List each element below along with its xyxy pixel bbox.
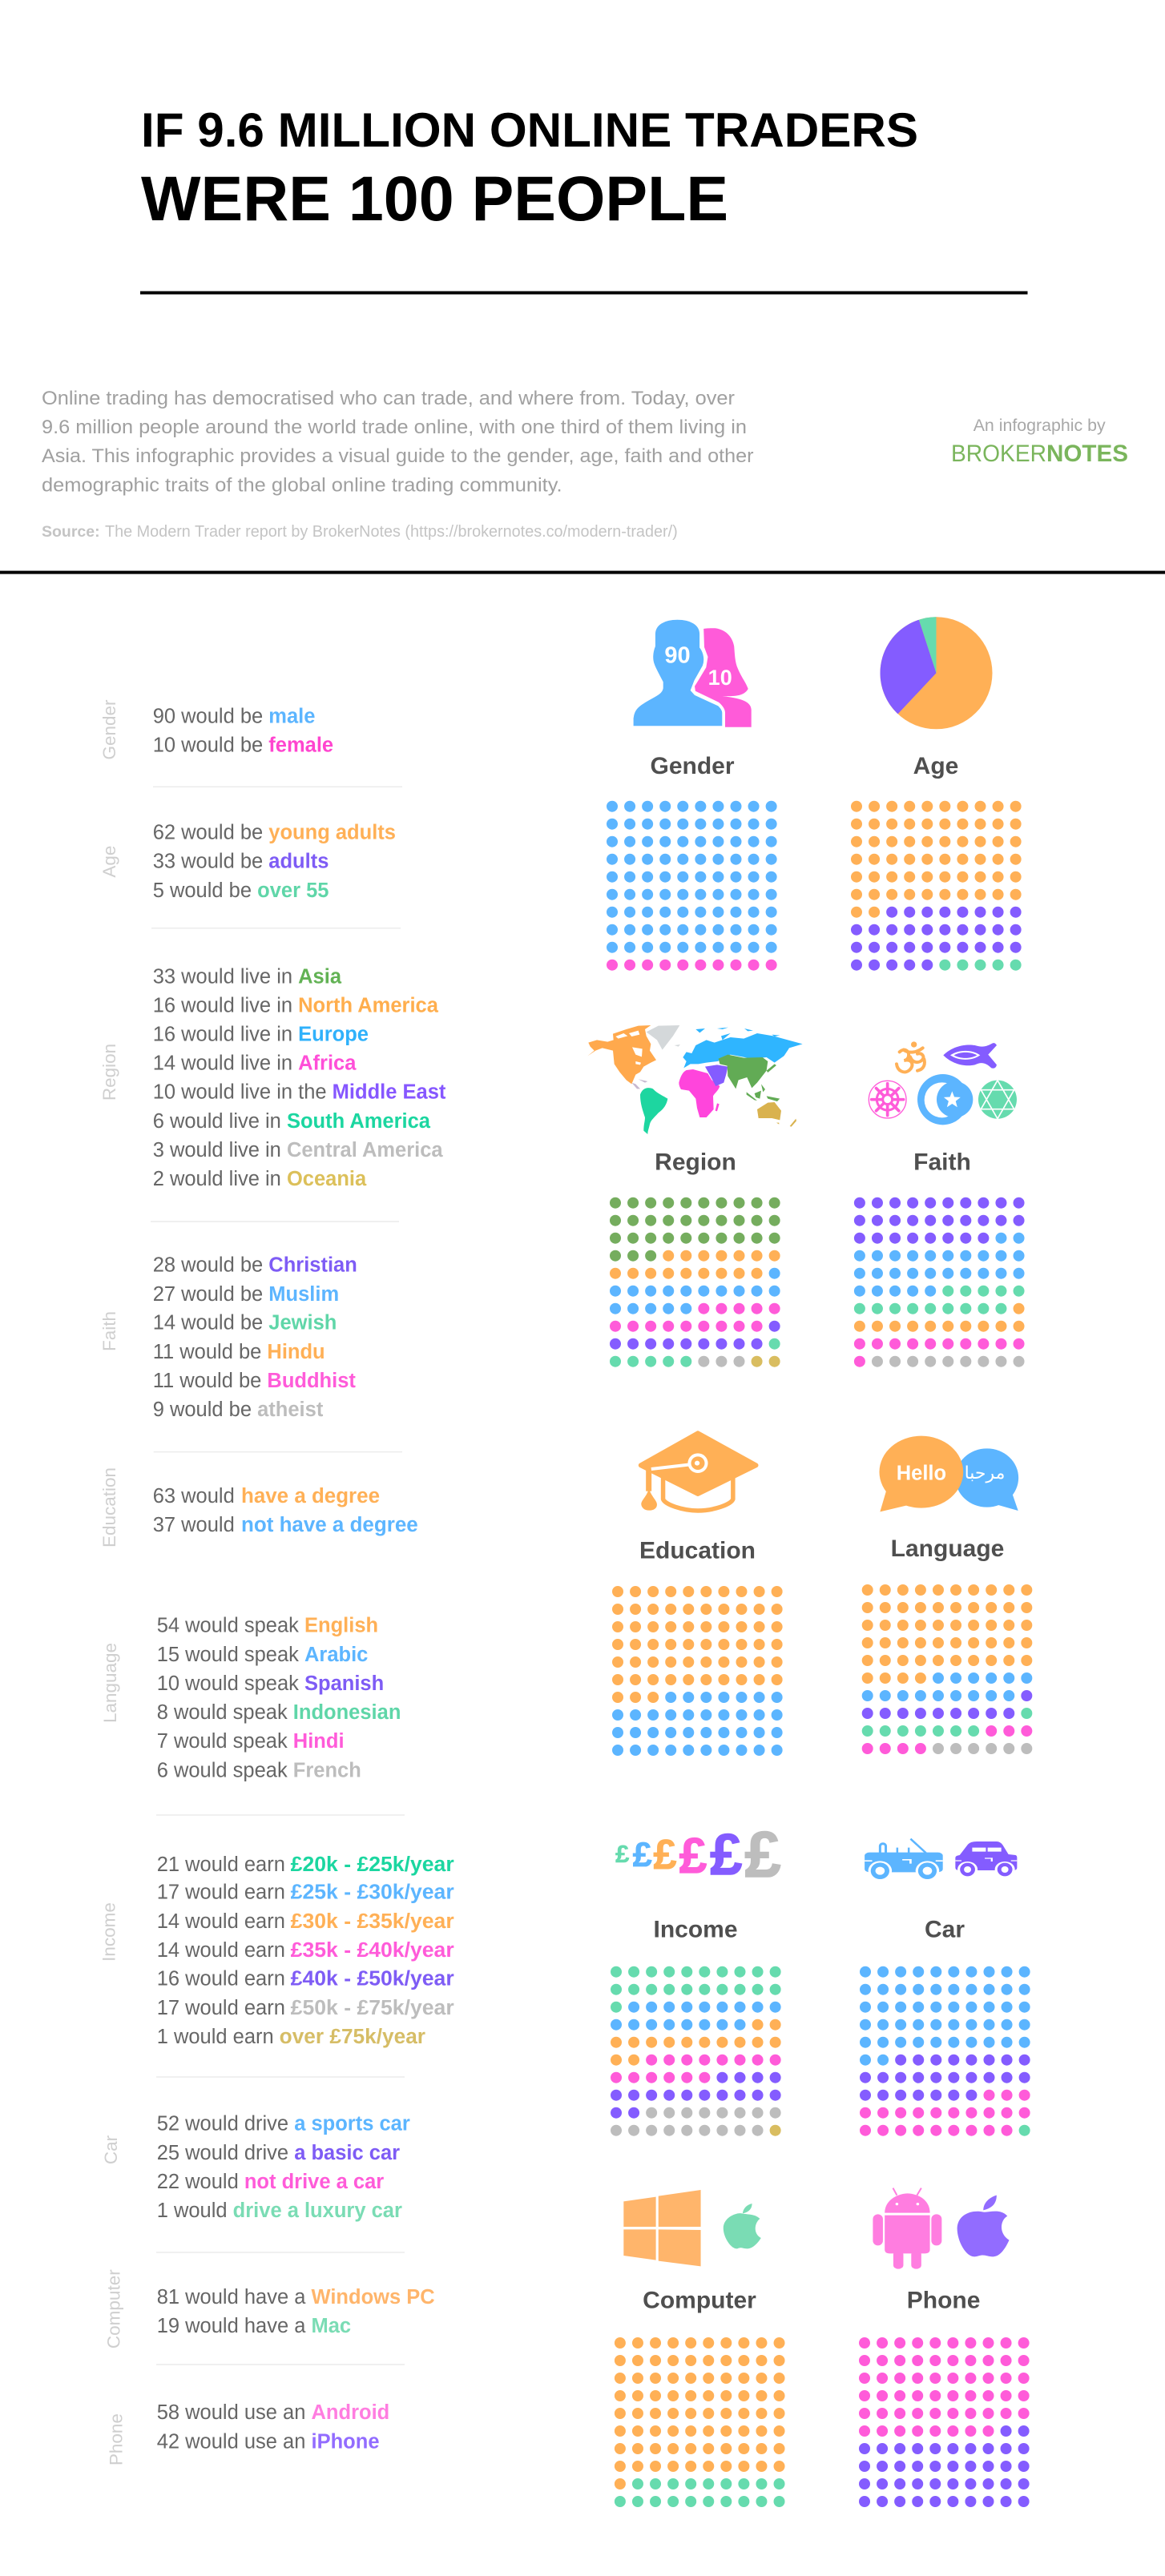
stats: region: Region [99, 1044, 119, 1101]
dot grid: computer [620, 2343, 780, 2502]
stats: income [99, 1854, 454, 2048]
stats: income: Income [99, 1902, 119, 1962]
heading: Car: Car [925, 1917, 965, 1943]
stats: income: 17 would earn [157, 1997, 285, 2019]
icon: pound signs: £ [744, 1819, 781, 1891]
dot grid: phone [865, 2343, 1025, 2502]
icon: male and female silhouettes [632, 618, 752, 727]
heading: Faith: Faith [913, 1149, 971, 1176]
icon: star of David [978, 1081, 1017, 1119]
icon: speech bubbles: Hello [897, 1462, 946, 1484]
stats: income: 17 would earn [157, 1882, 285, 1904]
stats: region: 16 would live in Europe [153, 1024, 369, 1046]
stats: language: 10 would speak Spanish [157, 1672, 384, 1695]
intro text: Online trading has democratised who can trade, and where from. Today, over [42, 388, 735, 409]
icon: male and female silhouettes: 90 [664, 642, 691, 668]
intro text: 9.6 million people around the world trade online, with one third of them living in [42, 417, 747, 438]
dot grid: region [615, 1203, 776, 1362]
intro text: demographic traits of the global online trading community. [42, 474, 562, 497]
icon: star and crescent [917, 1074, 973, 1125]
stats: income: £50k - £75k/year [291, 1997, 454, 2019]
stats: education [99, 1467, 418, 1548]
panel: phone [865, 2188, 1025, 2502]
stats: faith: 28 would be Christian [153, 1254, 357, 1277]
stats: region: 14 would live in Africa [153, 1053, 357, 1075]
panel: education [618, 1433, 778, 1750]
stats: income: £35k - £40k/year [291, 1939, 454, 1962]
heading: Age: Age [913, 753, 958, 779]
panel: income [615, 1819, 781, 2131]
panel: computer [620, 2190, 780, 2502]
icon: faith symbols [869, 1043, 1017, 1125]
heading: Education: Education [639, 1538, 756, 1564]
stats: computer: 81 would have a Windows PC [157, 2286, 435, 2308]
icon: age pie chart [880, 617, 992, 729]
stats: faith: 11 would be Buddhist [153, 1370, 356, 1392]
icon: Windows and Apple logos [623, 2190, 761, 2266]
title: WERE 100 PEOPLE [141, 163, 728, 234]
stats: language: 7 would speak Hindi [157, 1730, 345, 1753]
icon: cars [865, 1839, 1017, 1881]
stats: income: 14 would earn [157, 1939, 285, 1962]
stats: language: 15 would speak Arabic [157, 1644, 368, 1666]
source line: The Modern Trader report by BrokerNotes (https://brokernotes.co/modern-trader/) [105, 523, 678, 541]
stats: car: Car [101, 2135, 121, 2164]
dot grid: language [868, 1590, 1028, 1749]
stats: education: Education [99, 1467, 119, 1548]
stats: language: 54 would speak English [157, 1615, 378, 1637]
stats: income: £40k - £50k/year [291, 1968, 454, 1990]
stats: computer: Computer [103, 2269, 123, 2349]
dot grid: age [857, 807, 1017, 965]
title: IF 9.6 MILLION ONLINE TRADERS [141, 103, 918, 157]
stats: income: £20k - £25k/year [291, 1854, 454, 1876]
stats: gender: 10 would be female [153, 735, 333, 757]
icon: om [897, 1043, 925, 1072]
credit: BrokerNotes logo: BROKER [951, 441, 1046, 467]
stats: phone [106, 2401, 389, 2465]
stats: region [99, 966, 446, 1190]
stats: age: Age [99, 846, 119, 878]
dot grid: faith [860, 1203, 1020, 1362]
stats: age: 62 would be young adults [153, 822, 396, 844]
icon: speech bubbles [879, 1436, 1018, 1511]
stats: phone: Phone [106, 2413, 126, 2465]
icon: pound signs: £ [679, 1829, 707, 1884]
icon: Android and Apple logos [873, 2188, 1010, 2269]
stats: faith [99, 1254, 357, 1421]
icon: pound signs [615, 1819, 781, 1891]
icon: basic car [955, 1841, 1017, 1878]
panel: age [857, 617, 1017, 965]
icon: world map [587, 1025, 803, 1134]
icon: apple [957, 2196, 1010, 2256]
stats: income: over £75k/year [280, 2026, 425, 2048]
stats: income: £30k - £35k/year [291, 1910, 454, 1933]
stats: age: 5 would be over 55 [153, 879, 329, 902]
icon: pound signs: £ [615, 1840, 629, 1868]
icon: android robot [873, 2188, 941, 2269]
intro text: Asia. This infographic provides a visual guide to the gender, age, faith and other [42, 445, 753, 467]
stats: gender: Gender [99, 699, 119, 760]
heading: Computer: Computer [643, 2288, 756, 2314]
panel: stat list [99, 699, 454, 2465]
stats: gender: 90 would be male [153, 706, 315, 728]
icon: pound signs: £ [633, 1836, 652, 1874]
credit: BrokerNotes logo: NOTES [1046, 441, 1128, 467]
stats: income: £25k - £30k/year [291, 1882, 454, 1904]
icon: pound signs: £ [710, 1823, 742, 1887]
icon: male and female silhouettes: 10 [708, 666, 732, 690]
heading: Language: Language [891, 1536, 1004, 1562]
intro text [42, 388, 753, 497]
stats: region: 3 would live in Central America [153, 1139, 443, 1161]
dot grid: gender [612, 807, 772, 965]
icon: apple [724, 2204, 761, 2248]
heading: Income: Income [653, 1917, 738, 1943]
stats: education: 37 would [153, 1514, 235, 1536]
stats: computer: 19 would have a Mac [157, 2315, 351, 2337]
stats: region: 33 would live in Asia [153, 966, 342, 988]
stats: language [100, 1615, 401, 1781]
title [141, 103, 918, 234]
heading: Region: Region [655, 1149, 736, 1176]
icon: graduation cap [641, 1433, 756, 1511]
stats: faith: 9 would be atheist [153, 1399, 324, 1421]
panel: gender [612, 618, 772, 965]
source line: Source: [42, 523, 100, 541]
stats: region: 10 would live in the Middle East [153, 1081, 446, 1104]
stats: region: 2 would live in Oceania [153, 1168, 367, 1190]
icon: convertible [865, 1839, 943, 1881]
icon: dharma wheel [869, 1081, 906, 1118]
panel: faith [860, 1043, 1020, 1362]
heading: Gender: Gender [650, 753, 735, 779]
panel: car [865, 1839, 1026, 2131]
dot grid: income [616, 1972, 776, 2131]
stats: region: 16 would live in North America [153, 995, 439, 1017]
stats: region: 6 would live in South America [153, 1110, 431, 1133]
panel: region [587, 1025, 803, 1362]
stats: car [101, 2113, 410, 2222]
stats: income: 21 would earn [157, 1854, 285, 1876]
stats: faith: 11 would be Hindu [153, 1341, 325, 1363]
stats: computer [103, 2269, 435, 2349]
stats: faith: 14 would be Jewish [153, 1312, 337, 1334]
stats: language: Language [100, 1643, 120, 1723]
stats: income: 1 would earn [157, 2026, 274, 2048]
stats: car: 25 would drive a basic car [157, 2142, 400, 2164]
panel: language [868, 1436, 1028, 1749]
stats: phone: 42 would use an iPhone [157, 2431, 380, 2453]
icon: windows logo [623, 2190, 701, 2266]
stats: income: 14 would earn [157, 1910, 285, 1933]
stats: car: 52 would drive a sports car [157, 2113, 410, 2135]
icon: speech bubbles: مرحبا [965, 1463, 1005, 1483]
stats: education: 63 would [153, 1485, 235, 1507]
stats: car: 22 would not drive a car [157, 2171, 384, 2193]
stats: age [99, 822, 396, 902]
stats: car: 1 would drive a luxury car [157, 2200, 402, 2222]
stats: faith: Faith [99, 1311, 119, 1351]
stats: gender [99, 699, 333, 760]
dot grid: education [618, 1592, 778, 1750]
icon: pound signs: £ [654, 1832, 677, 1878]
credit: BrokerNotes logo: An infographic by [974, 416, 1106, 435]
stats: language: 8 would speak Indonesian [157, 1701, 401, 1724]
stats: faith: 27 would be Muslim [153, 1283, 339, 1306]
stats: age: 33 would be adults [153, 851, 329, 873]
stats: language: 6 would speak French [157, 1759, 361, 1781]
icon: ichthys fish [943, 1043, 997, 1069]
heading: Phone: Phone [907, 2288, 980, 2314]
stats: phone: 58 would use an Android [157, 2401, 389, 2424]
stats: education: have a degree [241, 1485, 380, 1507]
stats: income: 16 would earn [157, 1968, 285, 1990]
dot grid: car [865, 1972, 1026, 2131]
stats: education: not have a degree [241, 1514, 418, 1536]
credit: BrokerNotes logo [951, 416, 1128, 467]
